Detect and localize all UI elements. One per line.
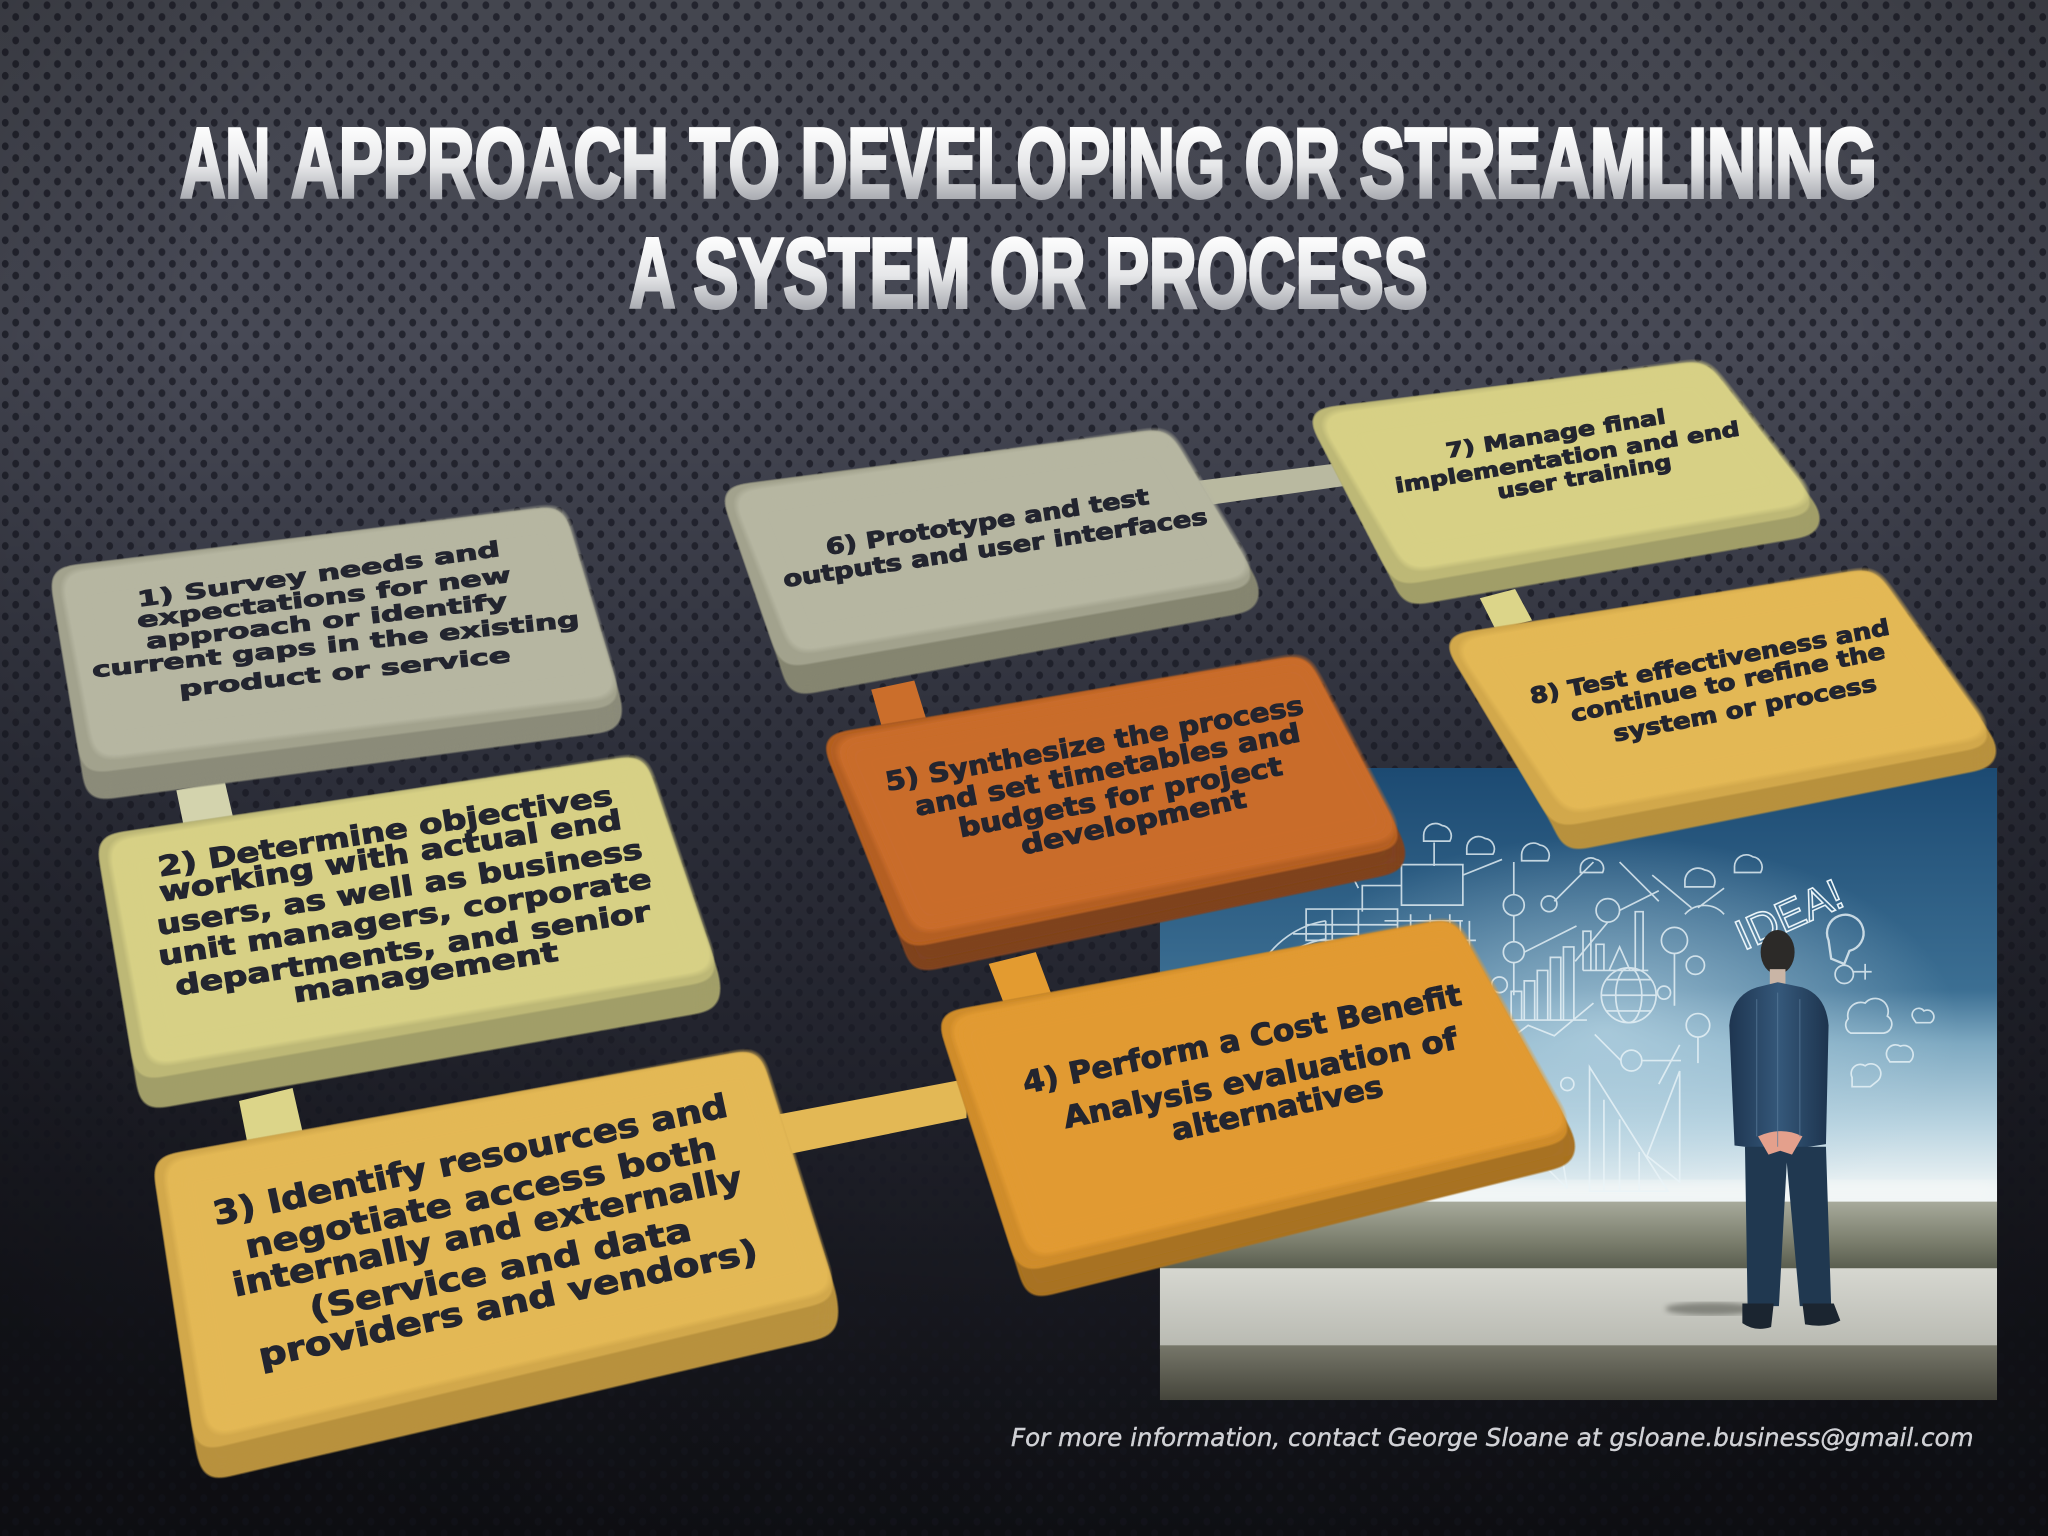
step 8 text: 8) Test effectiveness and <box>1528 615 1892 710</box>
panel: step 3 <box>152 1048 839 1482</box>
step 7 text: implementation and end <box>1393 417 1741 498</box>
connector 3 to 4 <box>773 1079 967 1155</box>
step 1 text: approach or identify <box>145 589 509 654</box>
step 7 text: user training <box>1495 450 1673 504</box>
panel: step 8 <box>1439 567 1998 853</box>
panel: step 6 <box>718 427 1260 697</box>
connector 4 to 5 <box>989 952 1053 1008</box>
step 8 text <box>1528 615 1892 748</box>
step 4 text <box>1020 978 1464 1148</box>
step 2 text: working with actual end <box>157 805 624 909</box>
panel: step 2 <box>95 754 721 1112</box>
connector 1 to 2 <box>176 781 234 828</box>
title: PROCESS <box>1105 218 1428 328</box>
step 2 text <box>155 781 654 1009</box>
step 3 text: negotiate access both <box>242 1129 720 1266</box>
step 8 text: continue to refine the <box>1569 638 1887 728</box>
step 2 text: departments, and senior <box>173 897 653 1002</box>
sketched diagrams: IDEA! <box>1728 870 1851 960</box>
step 3 text: providers and vendors) <box>255 1232 761 1375</box>
photo: businessman facing a wall of sketched diagrams <box>1160 768 1997 1400</box>
step 5 text: budgets for project <box>956 752 1285 844</box>
step 1 text: expectations for new <box>136 563 512 633</box>
step 1 text: 1) Survey needs and <box>136 537 501 612</box>
step 4 text: Analysis evaluation of <box>1060 1022 1461 1136</box>
contact line: For more information, contact George Sloane at gsloane.business@gmail.com <box>1011 1423 1974 1452</box>
step 4 text: alternatives <box>1168 1069 1386 1148</box>
title: APPROACH <box>291 108 669 218</box>
title: DEVELOPING <box>801 108 1225 218</box>
step 3 text: internally and externally <box>229 1159 745 1304</box>
title <box>180 108 1877 328</box>
title: AN <box>180 108 270 218</box>
step 5 text: and set timetables and <box>912 719 1303 823</box>
sketched diagrams <box>1260 823 1934 1191</box>
step 6 text: outputs and user interfaces <box>781 504 1209 593</box>
title: A <box>630 218 675 328</box>
step 7 text <box>1393 404 1741 504</box>
step 1 text: product or service <box>178 643 512 702</box>
step 3 text: (Service and data <box>306 1211 695 1329</box>
step 6 text: 6) Prototype and test <box>824 484 1151 561</box>
step 1 text: current gaps in the existing <box>91 607 581 683</box>
panel: step 7 <box>1304 359 1822 607</box>
connector 2 to 3 <box>239 1088 303 1147</box>
step 5 text: 5) Synthesize the process <box>883 691 1306 798</box>
step 5 text <box>883 691 1306 861</box>
step 8 text: system or process <box>1611 671 1879 748</box>
title: OR <box>990 218 1085 328</box>
connector 5 to 6 <box>871 680 926 726</box>
step 2 text: users, as well as business <box>155 834 645 942</box>
step 7 text: 7) Manage final <box>1444 404 1667 463</box>
step 3 text <box>209 1087 761 1375</box>
step 2 text: management <box>291 937 560 1009</box>
connector 6 to 7 <box>1189 462 1345 507</box>
title: TO <box>690 108 780 218</box>
step 2 text: 2) Determine objectives <box>156 781 615 883</box>
businessman <box>1665 930 1840 1329</box>
panel: step 4 <box>935 917 1576 1301</box>
step 3 text: 3) Identify resources and <box>209 1087 731 1233</box>
step 2 text: unit managers, corporate <box>156 864 654 973</box>
step 5 text: development <box>1018 784 1249 861</box>
title: OR <box>1245 108 1340 218</box>
connector 7 to 8 <box>1480 589 1532 630</box>
panel: step 1 <box>48 504 623 802</box>
title: SYSTEM <box>694 218 970 328</box>
panel: step 5 <box>819 653 1407 974</box>
step 6 text <box>781 484 1209 593</box>
step 1 text <box>91 537 581 702</box>
step 4 text: 4) Perform a Cost Benefit <box>1020 978 1464 1101</box>
